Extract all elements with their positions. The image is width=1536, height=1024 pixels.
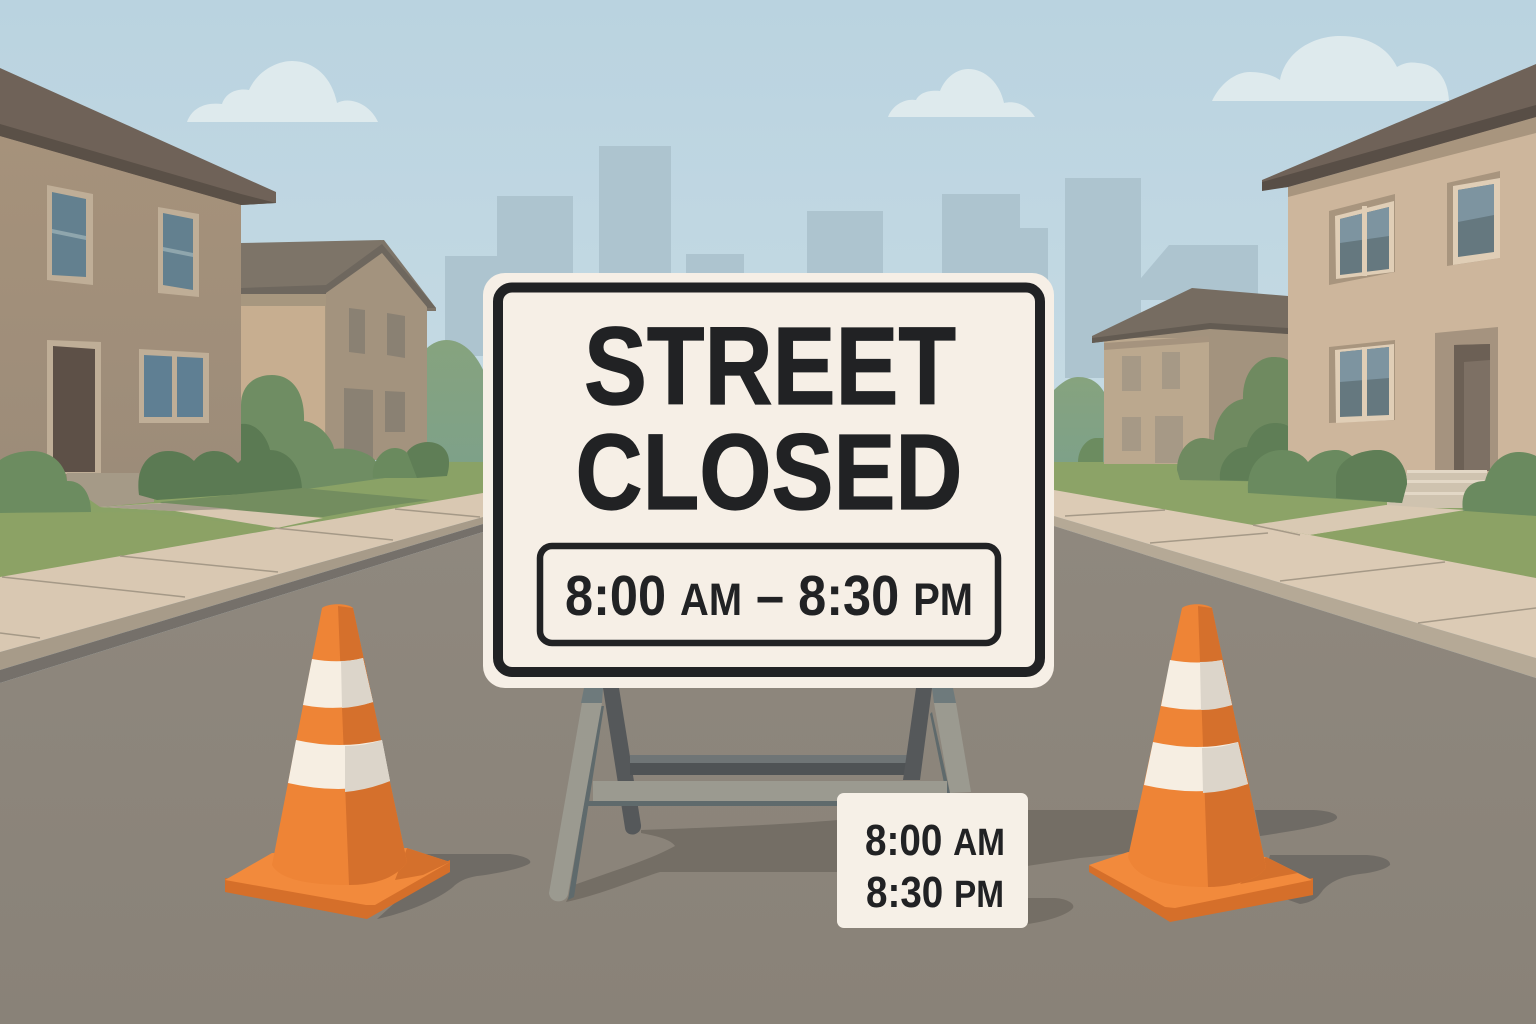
small hours sign — [837, 793, 1028, 928]
bushes: left — [0, 375, 449, 513]
sky — [0, 0, 1536, 560]
house: right far — [1092, 288, 1288, 464]
left traffic cone — [225, 604, 450, 919]
sign heading: CLOSED — [576, 411, 962, 532]
sign heading — [576, 305, 962, 532]
right lawn — [1054, 462, 1536, 585]
sign hours box — [540, 546, 998, 643]
right sidewalk — [1054, 490, 1536, 678]
sign heading: STREET — [584, 305, 956, 428]
main sign — [483, 273, 1054, 688]
left sidewalk — [0, 493, 483, 683]
cone shadows — [377, 810, 1390, 919]
right traffic cone — [1089, 604, 1313, 922]
right path and front lawn — [1253, 505, 1536, 578]
small hours sign: 8:30 PM — [866, 868, 1004, 917]
house: right near — [1262, 64, 1536, 508]
sign stand — [549, 688, 971, 901]
left path and front lawn — [0, 488, 430, 577]
sign hours box: 8:00 AM – 8:30 PM — [565, 564, 973, 628]
left lawn — [0, 460, 484, 585]
road — [0, 526, 1536, 1024]
background trees — [427, 340, 1104, 465]
house: left near — [0, 68, 276, 507]
clouds — [187, 36, 1449, 122]
bushes: right — [1078, 357, 1536, 516]
house: left far — [241, 240, 436, 462]
city skyline — [445, 146, 1258, 476]
sign stand shadow — [566, 810, 1140, 924]
small hours sign: 8:00 AM — [865, 816, 1005, 865]
